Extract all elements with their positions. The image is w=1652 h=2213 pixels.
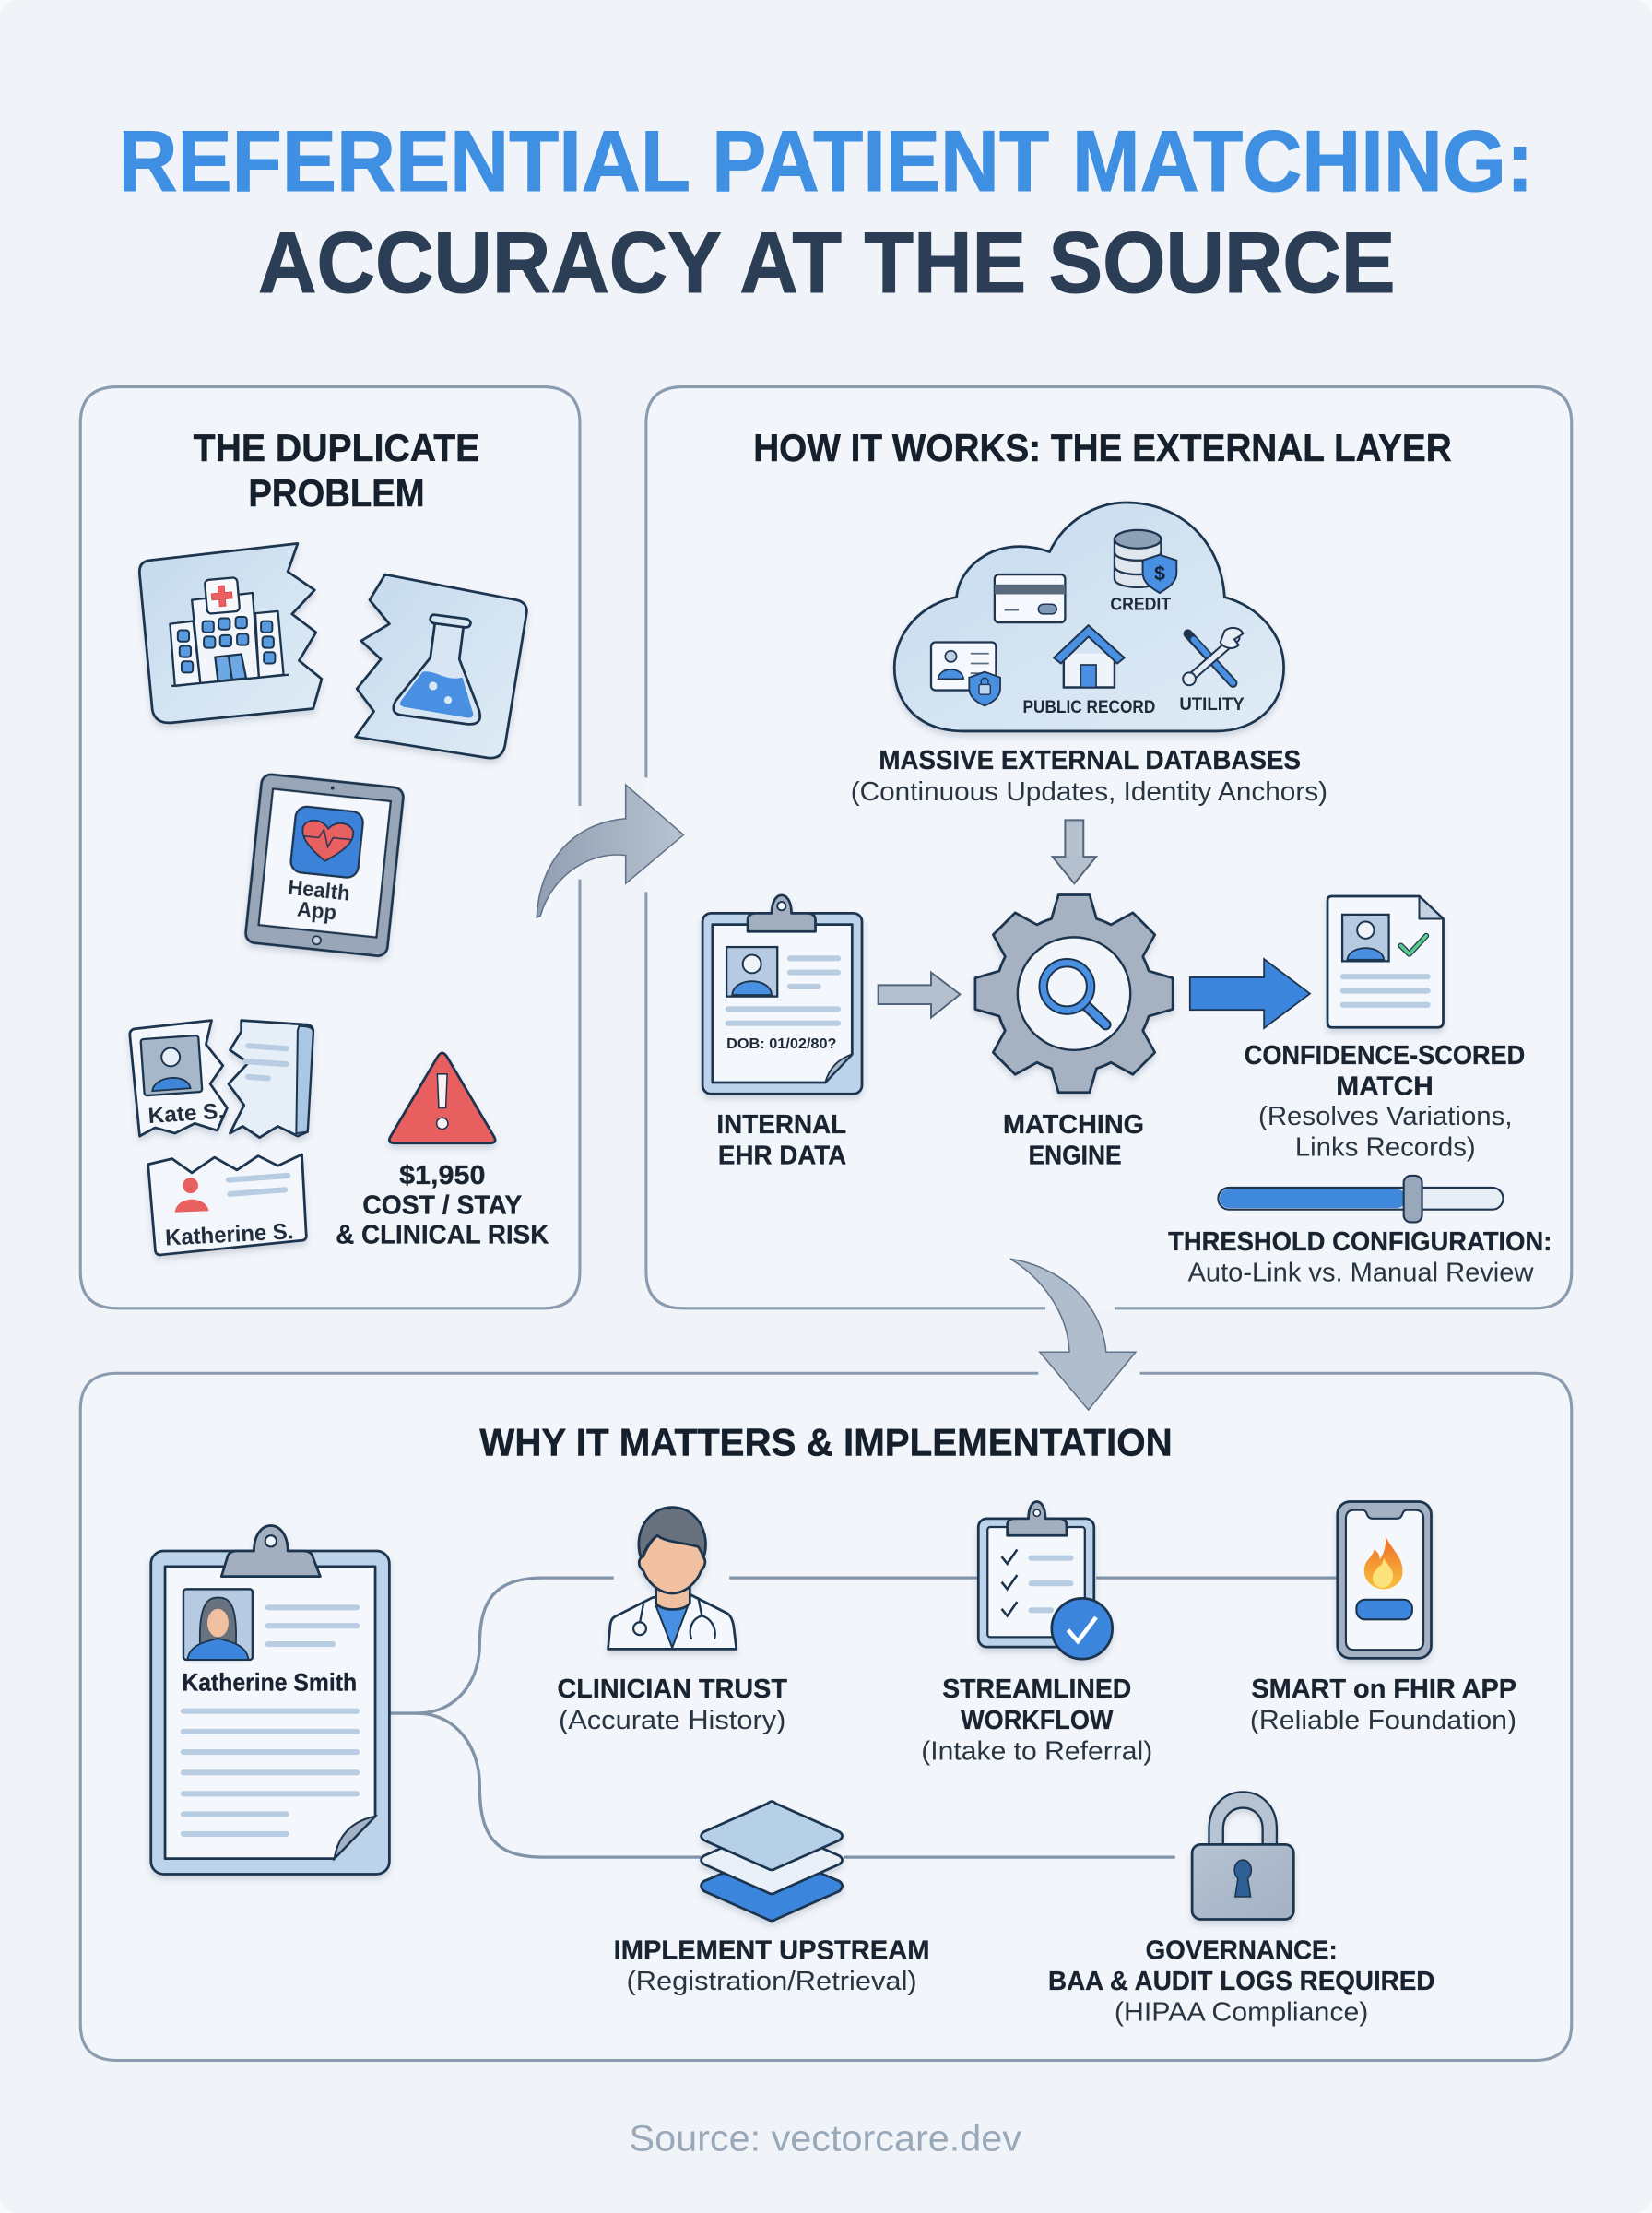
- icon: patient clipboard: [151, 1526, 389, 1874]
- text: threshold configuration: THRESHOLD CONFIGURATION:: [1168, 1227, 1552, 1257]
- arrow: EHR to engine: [879, 973, 960, 1018]
- icon: matched document: [1328, 896, 1444, 1027]
- icon: internal EHR clipboard: [702, 895, 862, 1094]
- icon: torn Kate S. record: [130, 1021, 313, 1138]
- label: governance: BAA & AUDIT LOGS REQUIRED: [1048, 1967, 1434, 1996]
- title: [119, 113, 1533, 311]
- label: streamlined workflow: WORKFLOW: [961, 1706, 1114, 1735]
- icon: workflow checklist: [978, 1501, 1113, 1659]
- icon: tools: [1183, 628, 1243, 685]
- source line: Source: vectorcare.dev: [630, 2118, 1021, 2159]
- icon: torn lab flask card: [356, 574, 526, 758]
- label: streamlined workflow: [921, 1675, 1152, 1767]
- text: confidence-scored match: Links Records): [1295, 1133, 1476, 1163]
- heading: why it matters: WHY IT MATTERS & IMPLEMENTATION: [479, 1422, 1173, 1464]
- icon: id card with lock: [931, 643, 1000, 705]
- label: internal EHR data: EHR DATA: [718, 1142, 846, 1171]
- label: matching engine: [1003, 1110, 1144, 1171]
- label: implement upstream: (Registration/Retrieval): [626, 1967, 917, 1996]
- label: utility: UTILITY: [1179, 695, 1245, 715]
- icon: stacked layers: [702, 1802, 843, 1921]
- stat: cost per stay: & CLINICAL RISK: [336, 1220, 549, 1249]
- arrow: problem to how it works: [537, 785, 683, 917]
- connector lines: [389, 1578, 1336, 1857]
- heading: the duplicate problem: PROBLEM: [248, 472, 425, 515]
- icon: tablet health app: Health: [287, 875, 351, 905]
- icon: padlock: [1192, 1792, 1293, 1919]
- label: streamlined workflow: STREAMLINED: [942, 1675, 1131, 1704]
- text: confidence-scored match: [1245, 1041, 1525, 1163]
- text: confidence-scored match: CONFIDENCE-SCORED: [1245, 1041, 1525, 1071]
- label: public record: PUBLIC RECORD: [1022, 698, 1155, 717]
- icon: torn Kate S. record: Kate S.: [148, 1099, 225, 1129]
- label: implement upstream: [614, 1935, 929, 1996]
- arrow: databases to engine: [1053, 820, 1096, 883]
- icon: credit database: [1115, 530, 1176, 593]
- stat: cost per stay: [336, 1161, 549, 1249]
- label: governance: GOVERNANCE:: [1146, 1935, 1338, 1965]
- label: streamlined workflow: (Intake to Referral): [921, 1737, 1152, 1767]
- icon: clinician: [608, 1508, 737, 1649]
- icon: tablet health app: [245, 774, 404, 957]
- icon: credit database: $: [1154, 562, 1165, 585]
- icon: SMART on FHIR phone: [1338, 1501, 1432, 1658]
- label: matching engine: MATCHING: [1003, 1110, 1144, 1140]
- icon: internal EHR clipboard: DOB: 01/02/80?: [726, 1035, 836, 1052]
- text: confidence-scored match: (Resolves Variations,: [1258, 1102, 1512, 1131]
- icon: torn Katherine S. record: Katherine S.: [165, 1219, 294, 1250]
- title: ACCURACY AT THE SOURCE: [258, 215, 1395, 311]
- label: governance: [1048, 1935, 1434, 2028]
- label: implement upstream: IMPLEMENT UPSTREAM: [614, 1935, 929, 1965]
- text: massive external databases: (Continuous Updates, Identity Anchors): [851, 777, 1328, 807]
- text: threshold configuration: [1168, 1227, 1552, 1288]
- heading: the duplicate problem: THE DUPLICATE: [194, 427, 479, 469]
- label: smart on fhir app: SMART on FHIR APP: [1251, 1675, 1516, 1704]
- threshold slider: [1218, 1176, 1504, 1222]
- label: governance: (HIPAA Compliance): [1115, 1998, 1368, 2028]
- label: clinician trust: (Accurate History): [559, 1706, 785, 1735]
- icon: matching engine gear: [975, 894, 1173, 1093]
- label: clinician trust: [557, 1675, 787, 1735]
- panel: why it matters and implementation: [80, 1373, 1572, 2060]
- arrow: how it works to why it matters: [1010, 1259, 1136, 1410]
- label: smart on fhir app: (Reliable Foundation): [1250, 1706, 1516, 1735]
- arrow: engine to match: [1190, 959, 1310, 1028]
- text: threshold configuration: Auto-Link vs. Manual Review: [1188, 1259, 1534, 1288]
- icon: torn Katherine S. record: [148, 1154, 306, 1255]
- title: REFERENTIAL PATIENT MATCHING:: [119, 113, 1533, 209]
- text: massive external databases: MASSIVE EXTERNAL DATABASES: [879, 746, 1301, 775]
- icon: cloud of external databases: [894, 503, 1284, 731]
- text: confidence-scored match: MATCH: [1336, 1072, 1434, 1102]
- heading: the duplicate problem: [194, 427, 479, 515]
- icon: torn hospital card: [139, 543, 322, 723]
- heading: how it works: HOW IT WORKS: THE EXTERNAL LAYER: [753, 427, 1452, 469]
- label: matching engine: ENGINE: [1029, 1142, 1122, 1171]
- stat: cost per stay: COST / STAY: [362, 1190, 522, 1220]
- label: credit: CREDIT: [1110, 595, 1171, 614]
- icon: house: [1054, 625, 1125, 687]
- label: internal EHR data: [716, 1110, 846, 1171]
- panel: the duplicate problem: [80, 387, 580, 1308]
- panel: how it works: [646, 387, 1572, 1308]
- text: massive external databases: [851, 746, 1328, 807]
- label: smart on fhir app: [1250, 1675, 1516, 1735]
- label: internal EHR data: INTERNAL: [716, 1110, 846, 1140]
- icon: warning triangle: [389, 1053, 495, 1143]
- label: Katherine Smith: Katherine Smith: [182, 1669, 357, 1697]
- icon: tablet health app: App: [296, 897, 337, 925]
- icon: credit card: [995, 574, 1065, 622]
- stat: cost per stay: $1,950: [399, 1161, 485, 1190]
- label: clinician trust: CLINICIAN TRUST: [557, 1675, 787, 1704]
